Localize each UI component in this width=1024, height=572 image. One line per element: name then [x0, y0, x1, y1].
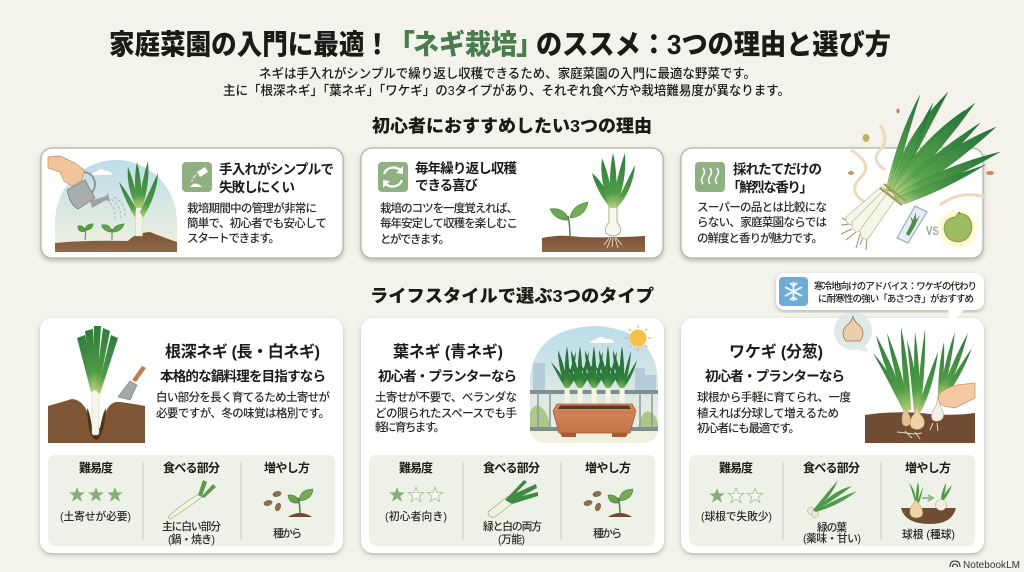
edible part: (薬味・甘い)	[803, 531, 861, 545]
propagation	[901, 460, 956, 541]
type body	[375, 390, 517, 434]
reason card 1	[41, 148, 343, 258]
title: 「	[387, 29, 415, 60]
type body: 土寄せが不要で、ベランダな	[375, 390, 517, 404]
type heading: ワケギ (分葱)	[729, 343, 823, 361]
illustration: deep-root leek	[48, 326, 146, 443]
edible part: (万能)	[498, 532, 525, 546]
edible part: 主に白い部分	[162, 519, 221, 533]
type heading: 初心者・プランターなら	[705, 368, 845, 384]
difficulty	[385, 460, 447, 523]
advice text: 寒冷地向けのアドバイス：ワケギの代わり	[814, 280, 977, 292]
title: ネギ栽培	[413, 29, 517, 60]
type heading: 本格的な鍋料理を目指すなら	[160, 368, 326, 384]
stats panel	[369, 455, 655, 546]
card heading: 毎年繰り返し収穫	[415, 160, 518, 176]
edible part: 食べる部分	[163, 460, 220, 475]
card body: の鮮度と香りが魅力です。	[697, 231, 823, 245]
card body: スーパーの品とは比較にな	[697, 200, 827, 214]
card body	[187, 201, 327, 245]
edible part	[483, 460, 542, 546]
title: 家庭菜園の入門に最適！	[109, 29, 390, 60]
title: のススメ：3つの理由と選び方	[536, 29, 891, 60]
card heading	[415, 160, 518, 193]
difficulty: (球根で失敗少)	[701, 509, 772, 523]
type heading	[160, 343, 326, 384]
card body: 栽培期間中の管理が非常に	[187, 201, 317, 215]
type heading: 根深ネギ (長・白ネギ)	[165, 343, 320, 361]
intro text: 主に「根深ネギ」「葉ネギ」「ワケギ」の3タイプがあり、それぞれ食べ方や栽培難易度が異なります。	[223, 83, 790, 98]
edible part: 緑と白の両方	[483, 519, 542, 533]
propagation: 増やし方	[905, 460, 951, 475]
type card 3	[681, 312, 984, 553]
illustration: wakegi bulbs and hand	[865, 327, 975, 443]
difficulty: 難易度	[399, 460, 433, 475]
type body: 球根から手軽に育てられ、一度	[697, 390, 852, 404]
illustration: balcony planter	[530, 325, 658, 443]
difficulty: (初心者向き)	[385, 509, 447, 523]
type card 1	[40, 318, 343, 553]
illustration: watering can	[48, 156, 177, 252]
icon: snowflake	[779, 277, 808, 306]
heading: three types: ライフスタイルで選ぶ3つのタイプ	[370, 286, 655, 306]
reason card 2	[361, 148, 663, 258]
type card 2	[361, 318, 664, 553]
difficulty	[701, 460, 772, 523]
type heading	[378, 343, 517, 384]
propagation: 種から	[593, 526, 622, 540]
edible part: 食べる部分	[483, 460, 540, 475]
stats panel	[689, 455, 975, 546]
illustration: bulb bubble	[834, 312, 872, 352]
card body	[380, 201, 518, 246]
edible part	[162, 460, 221, 546]
type body	[697, 390, 852, 435]
card heading: できる喜び	[415, 177, 478, 193]
type body: 軽に育ちます。	[375, 420, 445, 434]
advice text: に耐寒性の強い「あさつき」がおすすめ	[818, 293, 974, 305]
difficulty: (土寄せが必要)	[60, 509, 131, 523]
difficulty: 難易度	[79, 460, 113, 475]
edible part: (鍋・焼き)	[168, 532, 215, 546]
card body: 簡単で、初心者でも安心して	[187, 216, 327, 230]
propagation: 種から	[273, 526, 302, 540]
icon: cycle	[378, 162, 408, 192]
difficulty	[60, 460, 131, 523]
type body: 植えれば分球して増えるため	[697, 406, 839, 420]
type heading	[705, 343, 845, 384]
illustration: fresh leek bunch	[841, 92, 1000, 253]
propagation	[583, 460, 633, 540]
notebooklm credit: NotebookLM	[963, 560, 1020, 571]
propagation	[263, 460, 313, 540]
heading: three reasons: 初心者におすすめしたい3つの理由	[372, 116, 652, 136]
card heading: 採れたてだけの	[733, 162, 822, 177]
card body: スタートできます。	[187, 232, 280, 245]
intro text	[223, 66, 790, 98]
card heading	[727, 162, 822, 195]
card heading: 失敗しにくい	[219, 179, 295, 195]
title	[109, 29, 891, 60]
type body: どの限られたスペースでも手	[375, 406, 517, 420]
card heading: 「鮮烈な香り」	[727, 179, 813, 195]
difficulty: 難易度	[719, 460, 753, 475]
type body: 必要ですが、冬の味覚は格別です。	[156, 406, 330, 420]
propagation: 増やし方	[264, 460, 310, 475]
card heading	[219, 161, 334, 195]
edible part: 緑の葉	[817, 520, 847, 534]
propagation: 球根 (種球)	[902, 527, 955, 541]
reason card 3	[681, 92, 1000, 258]
illustration: fresh leek bunch: VS	[926, 226, 939, 238]
intro text: ネギは手入れがシンプルで繰り返し収穫できるため、家庭菜園の入門に最適な野菜です。	[259, 66, 756, 81]
icon: aroma	[695, 162, 725, 192]
card body: らない、家庭菜園ならでは	[697, 215, 827, 229]
icon: watering	[182, 162, 212, 192]
type body: 白い部分を長く育てるため土寄せが	[156, 390, 330, 404]
edible part: 食べる部分	[803, 460, 860, 475]
card body: とができます。	[380, 232, 450, 246]
callout: cold climate advice	[776, 273, 984, 325]
edible part	[803, 460, 861, 545]
card body: 栽培のコツを一度覚えれば、	[380, 201, 518, 215]
propagation: 増やし方	[585, 460, 631, 475]
illustration: regrowing leek	[542, 153, 645, 252]
title: 」	[516, 29, 544, 60]
type heading: 初心者・プランターなら	[378, 368, 517, 384]
card body	[697, 200, 827, 245]
stats panel	[48, 455, 335, 546]
advice text	[814, 280, 977, 305]
type body: 初心者にも最適です。	[697, 421, 800, 435]
type heading: 葉ネギ (青ネギ)	[393, 343, 503, 361]
card body: 毎年安定して収穫を楽しむこ	[380, 216, 518, 230]
type body	[156, 390, 330, 420]
card heading: 手入れがシンプルで	[219, 161, 334, 177]
